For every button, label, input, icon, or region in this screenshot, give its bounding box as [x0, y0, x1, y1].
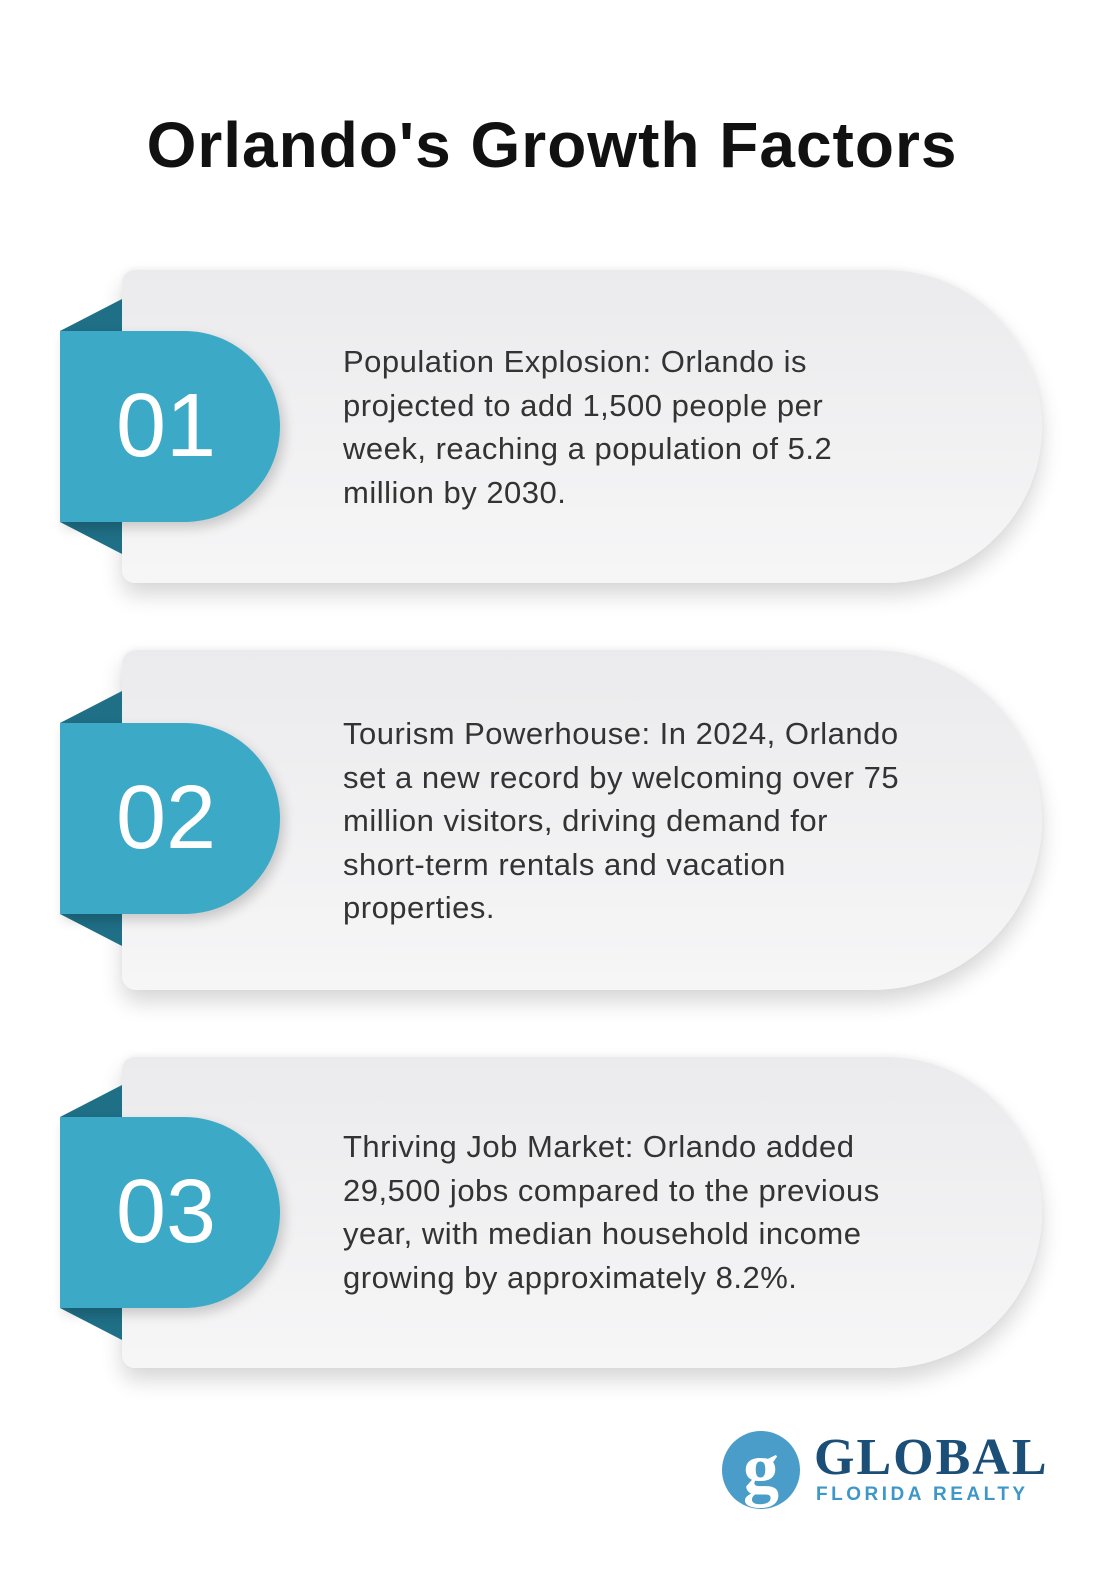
- fold bottom: [60, 914, 122, 946]
- text 03: year, with median household income: [343, 1216, 861, 1251]
- fold top: [60, 299, 122, 331]
- text 02: short-term rentals and vacation: [343, 846, 786, 882]
- panel: factor 01: [59, 268, 1050, 604]
- text 02: properties.: [343, 890, 495, 925]
- number tab 03: 03: [116, 1162, 216, 1262]
- text 02: million visitors, driving demand for: [343, 803, 828, 838]
- text 03: growing by approximately 8.2%.: [343, 1260, 797, 1294]
- text 02: [343, 716, 899, 925]
- panel: factor 02: [59, 648, 1050, 1010]
- text 02: Tourism Powerhouse: In 2024, Orlando: [343, 716, 899, 751]
- number tab 02: 02: [116, 768, 216, 868]
- number tab 01: 01: [116, 376, 216, 476]
- fold bottom: [60, 522, 122, 554]
- logo: FLORIDA REALTY: [816, 1484, 1029, 1505]
- text 02: set a new record by welcoming over 75: [343, 760, 899, 794]
- logo text: GLOBAL: [814, 1429, 1048, 1486]
- text 01: week, reaching a population of 5.2: [343, 431, 832, 466]
- fold top: [60, 691, 122, 723]
- icon: g circle: [722, 1430, 800, 1509]
- fold top: [60, 1085, 122, 1117]
- number tab 01: [60, 331, 280, 522]
- title: Orlando's Growth Factors: [147, 109, 957, 181]
- text 01: Population Explosion: Orlando is: [343, 344, 807, 379]
- text 01: [343, 344, 832, 510]
- text 01: million by 2030.: [343, 474, 566, 510]
- text 03: [343, 1129, 880, 1294]
- fold bottom: [60, 1308, 122, 1340]
- number tab 02: [60, 723, 280, 914]
- text 03: 29,500 jobs compared to the previous: [343, 1172, 880, 1208]
- panel: factor 03: [59, 1055, 1050, 1388]
- logo: [722, 1429, 1048, 1509]
- text 01: projected to add 1,500 people per: [343, 388, 823, 422]
- text 03: Thriving Job Market: Orlando added: [343, 1129, 855, 1164]
- number tab 03: [60, 1117, 280, 1308]
- icon: g circle: g: [743, 1430, 779, 1508]
